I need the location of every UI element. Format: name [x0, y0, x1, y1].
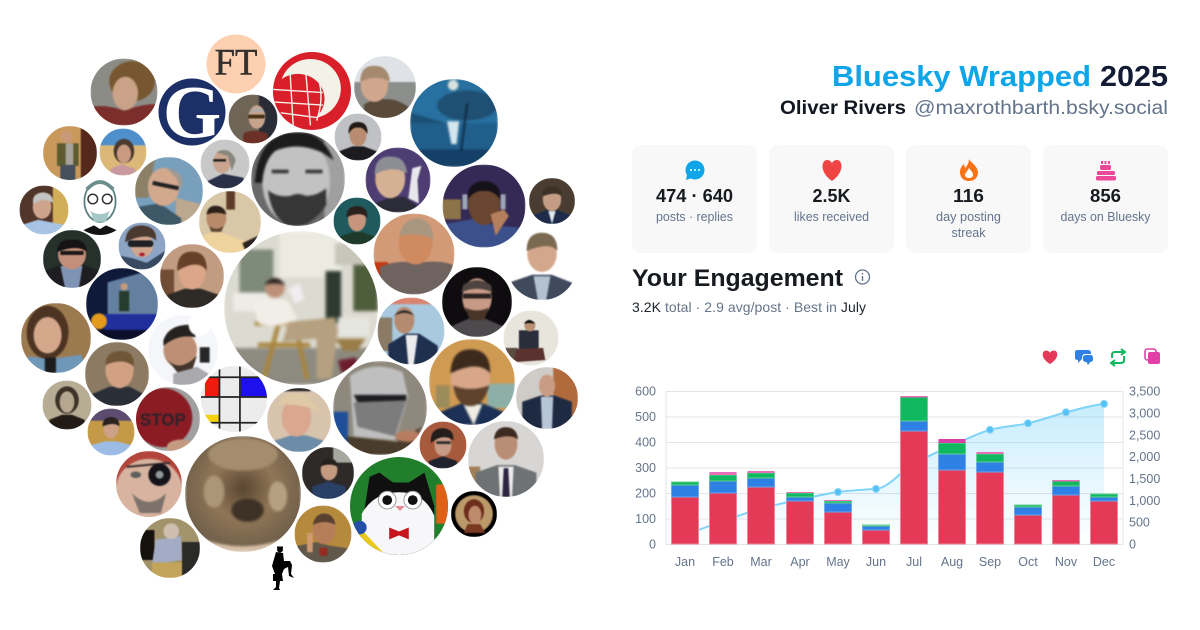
- cumulative area: [685, 404, 1104, 544]
- avatar: woman, brick background: [420, 422, 466, 468]
- title: Bluesky Wrapped: [832, 61, 1091, 93]
- right axis labels: 3,500: [1129, 384, 1160, 398]
- month labels: Mar: [750, 555, 772, 569]
- month labels: Jan: [675, 555, 695, 569]
- avatar: STOP sign sphere: [133, 387, 200, 455]
- avatar: young man seated, dark suit: [504, 310, 558, 366]
- panel: posts and replies: [632, 145, 757, 253]
- avatar: man on orange background: [43, 126, 97, 181]
- avatar: old sepia photograph: [42, 380, 92, 430]
- left axis and grid: [666, 391, 1123, 544]
- avatar: grey-haired man in blue shirt: [20, 186, 68, 234]
- left axis labels: [635, 384, 656, 552]
- avatar: Mondrian painting: [201, 366, 267, 432]
- replies bars: [672, 421, 1118, 530]
- title: 2025: [1100, 61, 1168, 93]
- avatar: man teal background: [334, 198, 380, 244]
- avatar: man with glasses, black background: [442, 267, 512, 337]
- avatar: man in sunglasses: [228, 94, 278, 144]
- avatar: cartoon man with cat: [366, 148, 430, 212]
- right axis labels: 0: [1129, 538, 1136, 552]
- month labels: Aug: [941, 555, 963, 569]
- month labels: Sep: [979, 555, 1001, 569]
- left axis labels: 200: [635, 486, 656, 500]
- chart legend icons: [1043, 349, 1160, 366]
- avatar: man in straw hat: [267, 388, 331, 452]
- icon: info: [856, 270, 870, 284]
- left axis labels: 500: [635, 410, 656, 424]
- avatar bubble cluster: [20, 34, 578, 590]
- right axis labels: 2,500: [1129, 428, 1160, 442]
- month labels: Jul: [906, 555, 922, 569]
- avatar: man in blue suit, outdoors: [378, 298, 444, 364]
- avatar: line sketch of man: [84, 180, 116, 235]
- right axis labels: 1,500: [1129, 472, 1160, 486]
- avatar: child with eyepatch: [116, 451, 182, 520]
- avatar: man in dark suit: [529, 178, 575, 224]
- avatar: woman in sunglasses: [118, 222, 166, 270]
- avatar: tree illustration: [410, 79, 498, 167]
- avatar: man in orange restaurant: [374, 214, 454, 294]
- panel: likes received: [769, 145, 894, 253]
- avatar: woman on beach: [100, 128, 146, 176]
- avatar: man with headphones: [442, 164, 526, 248]
- avatar: man in backwards cap: [148, 314, 218, 385]
- stat label: likes received: [794, 210, 869, 224]
- avatar: FT logo: [206, 34, 266, 94]
- avatar: woman with brown hair: [21, 303, 91, 373]
- avatar: curly-haired man: [90, 58, 158, 126]
- user name and handle: [780, 98, 1168, 119]
- avatar: black and white portrait: [251, 132, 345, 227]
- avatar: man in workshop: [302, 447, 354, 499]
- month labels: Nov: [1055, 555, 1078, 569]
- right axis labels: 500: [1129, 516, 1150, 530]
- avatar: main photo, man reading on veranda: [224, 231, 378, 385]
- icon: quotes: [1145, 349, 1160, 364]
- icon: heart: [823, 160, 841, 181]
- stat value: 474 · 640: [656, 186, 733, 206]
- month labels: Dec: [1093, 555, 1115, 569]
- avatar: bunny close-up: [185, 436, 301, 552]
- right axis labels: 2,000: [1129, 450, 1160, 464]
- icon: chat bubble: [686, 160, 704, 180]
- chart: monthly engagement stacked bars with cumulative line: [635, 384, 1160, 569]
- left axis labels: 300: [635, 461, 656, 475]
- avatar: cartoon cat with bow tie: [350, 457, 448, 555]
- month labels: Oct: [1018, 555, 1038, 569]
- month labels: [675, 555, 1115, 569]
- month labels: May: [826, 555, 851, 569]
- avatar: man on stage: [86, 268, 158, 340]
- right axis labels: 3,000: [1129, 406, 1160, 420]
- icon: birthday cake: [1096, 161, 1116, 180]
- avatar: smiling man, dark shirt: [85, 342, 149, 406]
- avatar: man in oil painting: [294, 506, 352, 562]
- icon: flame: [960, 159, 978, 181]
- left axis labels: 100: [635, 512, 656, 526]
- avatar: young man, warm interior: [160, 244, 224, 308]
- stat value: 116: [953, 186, 984, 206]
- avatar: bearded man in navy suit: [429, 339, 515, 425]
- left axis labels: 600: [635, 384, 656, 398]
- stat label second line: streak: [952, 226, 986, 240]
- quotes bars: [710, 396, 1080, 501]
- right axis labels: 1,000: [1129, 494, 1160, 508]
- stat label: posts · replies: [656, 210, 733, 224]
- avatar: elderly man at table: [140, 518, 200, 578]
- cumulative line: [685, 404, 1104, 533]
- avatar: man in grey suit: [468, 421, 544, 497]
- avatar: man in blazer, white background: [511, 232, 572, 300]
- month labels: Apr: [790, 555, 810, 569]
- icon: reposts: [1111, 349, 1125, 366]
- avatar: smiling blond person: [354, 56, 416, 119]
- icon: likes: [1043, 350, 1057, 364]
- panel: day posting streak: [906, 145, 1031, 253]
- stat value: 2.5K: [812, 186, 850, 206]
- avatar: silly walk silhouette: [272, 546, 294, 590]
- stat label: days on Bluesky: [1060, 210, 1151, 224]
- stat value: 856: [1090, 186, 1121, 206]
- avatar: STOP sign sphere: STOP: [140, 409, 186, 429]
- avatar: red globe logo: [271, 52, 351, 130]
- stat label: day posting: [936, 210, 1001, 224]
- user name and handle: Oliver Rivers: [780, 98, 906, 119]
- cumulative points: [834, 400, 1108, 496]
- month labels: Feb: [712, 555, 734, 569]
- avatar: grey-haired man in profile: [200, 140, 250, 188]
- icon: replies: [1075, 350, 1093, 365]
- reposts bars: [672, 397, 1118, 526]
- likes bars: [672, 431, 1118, 544]
- heading: Your Engagement: Your Engagement: [632, 265, 843, 292]
- avatar: woman in black ring: [451, 491, 497, 537]
- avatar: heavyset man in glasses: [43, 230, 101, 288]
- avatar: Guardian logo: G: [163, 71, 221, 154]
- month labels: Jun: [866, 555, 886, 569]
- user name and handle: @maxrothbarth.bsky.social: [914, 98, 1168, 119]
- left axis labels: 0: [649, 538, 656, 552]
- panel: days on Bluesky: [1043, 145, 1168, 253]
- avatar: smiling man with glasses: [135, 157, 203, 225]
- avatar: knight helmet: [333, 361, 427, 455]
- avatar: bald man in suit: [516, 367, 578, 429]
- left axis labels: 400: [635, 436, 656, 450]
- right axis labels: [1129, 384, 1160, 552]
- avatar: man in yellow shirt: [199, 191, 261, 253]
- avatar: man in light blue shirt: [88, 408, 134, 456]
- avatar: bearded man in black: [334, 114, 382, 160]
- avatar: FT logo: FT: [215, 42, 257, 83]
- engagement summary: 3.2K total · 2.9 avg/post · Best in July: [632, 299, 866, 315]
